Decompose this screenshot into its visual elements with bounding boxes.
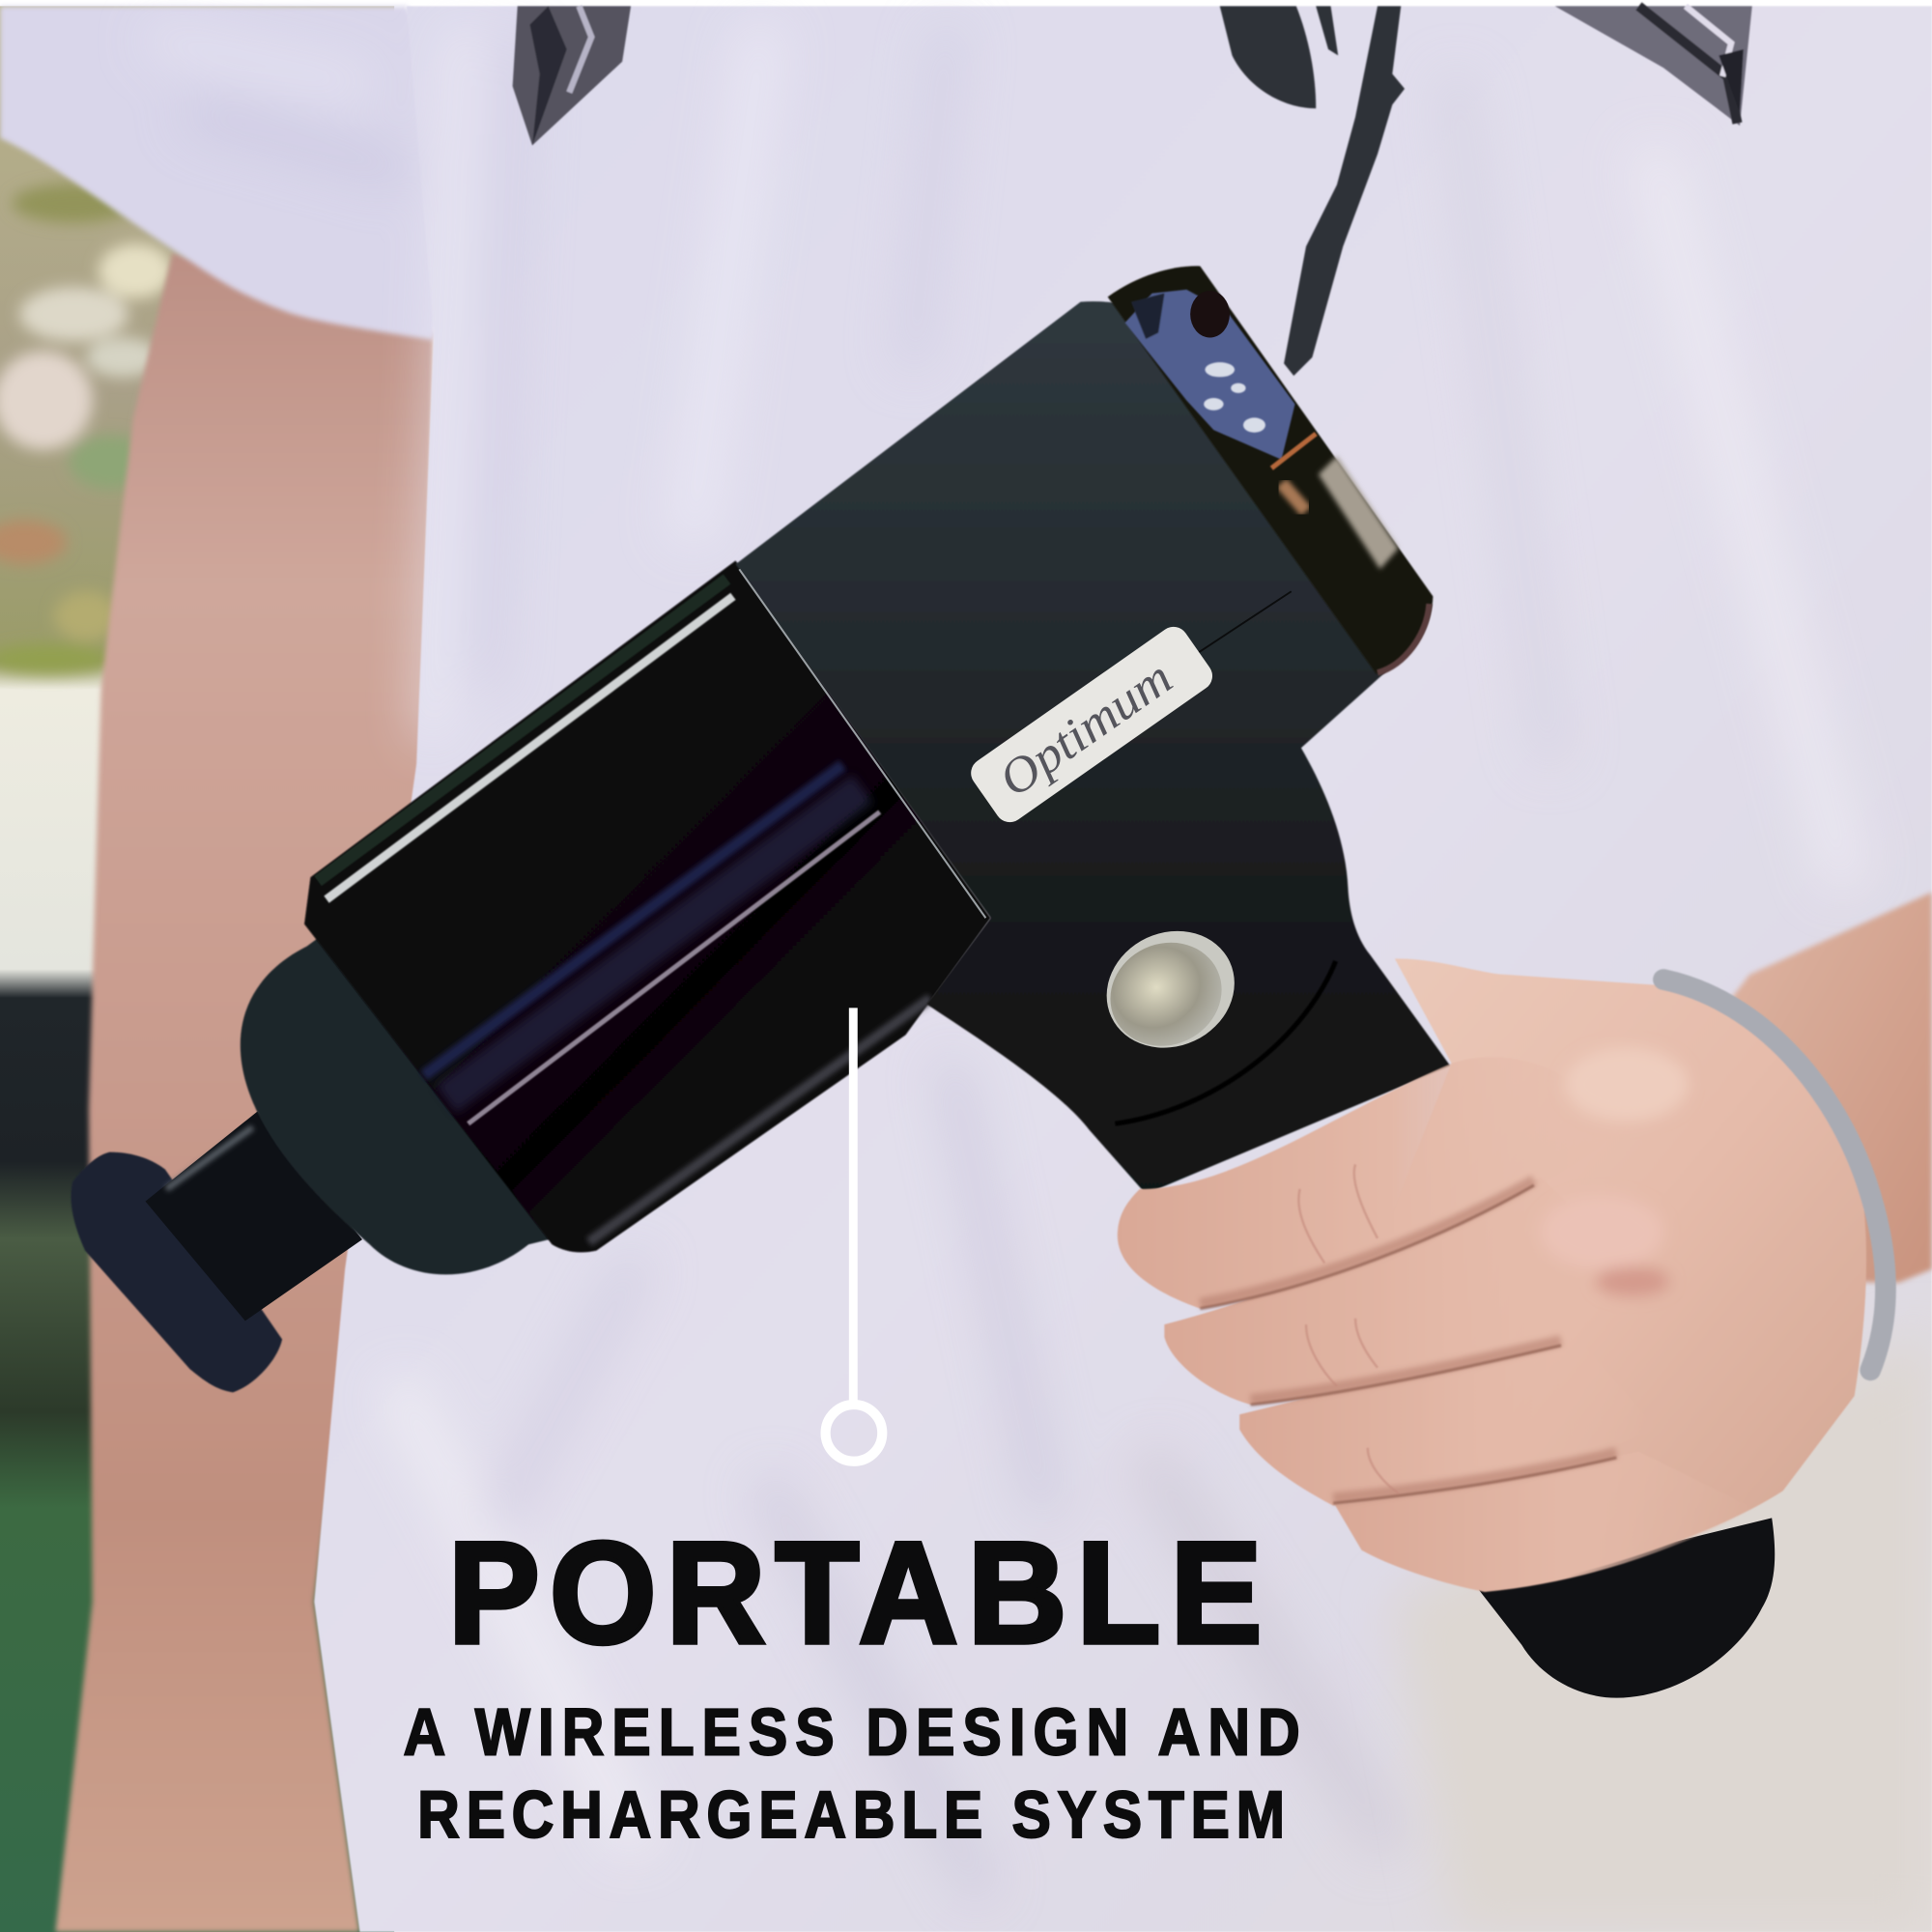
subheading <box>404 1694 1300 1852</box>
back of hand <box>1355 958 1866 1583</box>
barrel top dark-green edge <box>318 579 727 881</box>
body: grip contour <box>1115 961 1336 1123</box>
cap sky reflection <box>1125 290 1295 460</box>
print: rose stem and leaves <box>1220 6 1405 376</box>
cap dark spot <box>1190 291 1230 337</box>
index finger <box>1118 1057 1614 1309</box>
middle finger <box>1164 1177 1663 1405</box>
heading: PORTABLE <box>448 1512 1262 1673</box>
knuckle wrinkles <box>1298 1164 1399 1493</box>
cap lower rim <box>1378 604 1430 672</box>
brand label: Optimum <box>990 650 1182 808</box>
finger creases <box>1200 1185 1616 1503</box>
subheading line 1: A WIRELESS DESIGN AND <box>404 1694 1300 1769</box>
knuckle highlights <box>1540 1047 1688 1296</box>
wristband <box>1663 980 1886 1370</box>
massage gun <box>71 266 1775 1698</box>
barrel band pale <box>469 812 880 1123</box>
shirt print <box>513 6 1752 376</box>
gun: handle end <box>1479 1518 1775 1698</box>
shaft highlight <box>166 1127 252 1189</box>
print: left graphic <box>513 6 631 146</box>
body: seam <box>1198 591 1292 653</box>
shirt sleeve <box>0 6 466 340</box>
print: right graphic <box>1555 6 1752 126</box>
shirt lower-right warm area <box>1392 1331 1932 1932</box>
gun: shaft <box>146 1112 362 1321</box>
right forearm <box>1713 892 1932 1283</box>
callout ring <box>826 1405 882 1462</box>
subheading line 2: RECHARGEABLE SYSTEM <box>417 1776 1285 1852</box>
brand label <box>965 621 1218 828</box>
power button <box>1088 910 1254 1068</box>
gun: glossy barrel <box>304 560 991 1252</box>
barrel band blue <box>424 765 842 1076</box>
hand gripping handle <box>1118 958 1886 1592</box>
callout line <box>849 1008 858 1405</box>
cap clouds <box>1204 362 1265 433</box>
pinky finger <box>1333 1452 1756 1592</box>
callout connector <box>826 1008 882 1462</box>
cap tree silhouette <box>1131 294 1164 339</box>
gun: matte body <box>735 301 1450 1194</box>
gun: rubber collar <box>241 918 579 1274</box>
cap building reflection <box>1319 456 1399 569</box>
barrel lower edge <box>589 998 930 1242</box>
barrel band glow <box>446 788 863 1099</box>
gun: massage head disc <box>71 1152 282 1392</box>
cap orange rim <box>1271 434 1316 469</box>
body: rear edge hairline <box>739 569 985 918</box>
gun: glossy top cap <box>1108 266 1433 674</box>
ring finger <box>1239 1337 1658 1506</box>
finger crease shadows <box>1200 1180 1616 1498</box>
left arm <box>55 252 434 1932</box>
barrel top reflection <box>327 596 733 899</box>
